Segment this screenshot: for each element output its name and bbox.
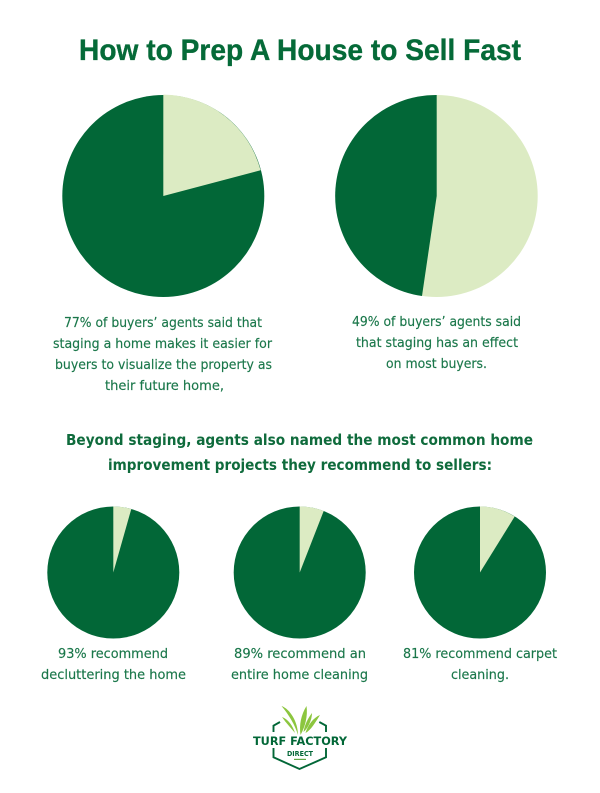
pie chart: 81%: [414, 506, 546, 638]
text: 77% caption: 77% of buyers’ agents said that: [64, 316, 262, 331]
pie chart: 49%: [335, 95, 538, 297]
pie chart: 77%: [62, 95, 264, 297]
subheading: improvement projects they recommend to sellers:: [108, 457, 492, 474]
icon: hexagon outline: [274, 722, 326, 769]
text: 93% caption: 93% recommend: [58, 647, 168, 662]
subheading: [66, 432, 533, 474]
text: 81% caption: cleaning.: [451, 668, 509, 683]
text: 49% caption: [352, 315, 521, 372]
text: 77% caption: buyers to visualize the property as: [55, 358, 272, 373]
title: How to Prep A House to Sell Fast: [79, 34, 521, 67]
text: 77% caption: staging a home makes it easier for: [53, 337, 273, 352]
text: 77% caption: [53, 316, 273, 394]
text: 89% caption: [231, 647, 368, 683]
text: 81% caption: 81% recommend carpet: [403, 647, 557, 662]
logo: Turf Factory Direct: [253, 706, 348, 769]
logo wordmark: TURF FACTORY: [253, 734, 348, 748]
logo sub-wordmark: DIRECT: [287, 750, 313, 758]
text: 89% caption: entire home cleaning: [231, 668, 368, 683]
text: 77% caption: their future home,: [105, 379, 224, 394]
text: 49% caption: on most buyers.: [386, 357, 487, 372]
pie chart: 93%: [47, 506, 179, 638]
text: 89% caption: 89% recommend an: [234, 647, 366, 662]
text: 49% caption: 49% of buyers’ agents said: [352, 315, 521, 330]
logo underline: [294, 759, 306, 760]
text: 81% caption: [403, 647, 557, 683]
subheading: Beyond staging, agents also named the most common home: [66, 432, 533, 449]
text: 93% caption: decluttering the home: [41, 668, 186, 683]
text: 49% caption: that staging has an effect: [356, 336, 518, 351]
icon: grass blades: [282, 706, 320, 735]
pie chart: 89%: [234, 506, 366, 638]
text: 93% caption: [41, 647, 186, 683]
